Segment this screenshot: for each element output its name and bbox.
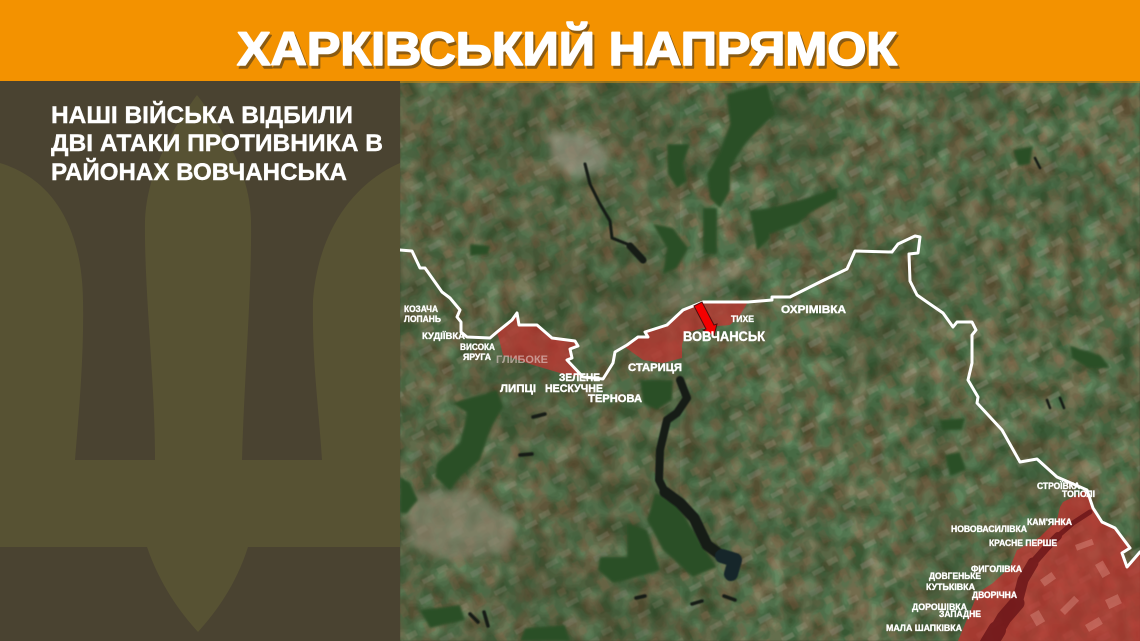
label: Kamianka: КАМ'ЯНКА bbox=[1027, 517, 1072, 527]
label: Kozacha Lopan bbox=[404, 305, 441, 322]
label: Topoli: ТОПОЛІ bbox=[1062, 489, 1095, 499]
rivers and reservoirs bbox=[470, 158, 1064, 626]
text: summary: ДВІ АТАКИ ПРОТИВНИКА В bbox=[51, 130, 383, 157]
label: Stroivka: СТРОЇВКА bbox=[1037, 481, 1080, 491]
map field texture bbox=[400, 81, 1140, 641]
label: Kozacha Lopan: ЛОПАНЬ bbox=[404, 314, 441, 324]
label: Vysoka Yaruha: ЯРУГА bbox=[463, 352, 491, 362]
header band bbox=[0, 0, 1140, 83]
label: Doroshivka: ДОРОШІВКА bbox=[912, 602, 967, 612]
label: Vysoka Yaruha bbox=[460, 343, 495, 360]
label: Zapadne: ЗАПАДНЕ bbox=[939, 609, 981, 619]
label: Krasne Pershe: КРАСНЕ ПЕРШЕ bbox=[989, 538, 1057, 548]
panel: left description bbox=[0, 81, 400, 641]
label: Kudiivka: КУДІЇВКА bbox=[422, 331, 466, 341]
text: summary: НАШІ ВІЙСЬКА ВІДБИЛИ bbox=[51, 101, 353, 129]
label: Okhrimivka: ОХРІМІВКА bbox=[781, 304, 846, 316]
urban areas bbox=[407, 132, 760, 560]
label: Zelene: ЗЕЛЕНЕ bbox=[559, 372, 600, 384]
label: Kozacha Lopan: КОЗАЧА bbox=[404, 304, 438, 314]
occupied area: Hlyboke bbox=[498, 317, 580, 376]
arrow: attack on Vovchansk bbox=[694, 302, 717, 336]
light field patches in occupied area bbox=[1030, 539, 1122, 632]
label: Vysoka Yaruha: ВИСОКА bbox=[460, 342, 495, 352]
label: Hlyboke: ГЛИБОКЕ bbox=[496, 354, 548, 366]
title: ХАРКІВСЬКИЙ НАПРЯМОК bbox=[239, 25, 899, 78]
forests bbox=[400, 84, 1110, 641]
label: Ternova: ТЕРНОВА bbox=[588, 393, 642, 405]
label: Dovhenke: ДОВГЕНЬКЕ bbox=[929, 571, 981, 581]
label: Tykhe: ТИХЕ bbox=[731, 314, 754, 324]
text: summary bbox=[51, 101, 383, 186]
label: Vovchansk: ВОВЧАНСЬК bbox=[683, 328, 765, 344]
front line border bbox=[400, 236, 1140, 567]
settlement labels bbox=[404, 304, 1095, 633]
label: Dvorichna: ДВОРІЧНА bbox=[972, 590, 1017, 600]
label: Lyptsi: ЛИПЦІ bbox=[500, 383, 536, 395]
label: Kutkivka: КУТЬКІВКА bbox=[926, 582, 975, 592]
label: Mala Shapkivka: МАЛА ШАПКІВКА bbox=[886, 623, 962, 633]
occupied area: Vovchansk bbox=[625, 302, 748, 363]
icon: trident watermark bbox=[0, 95, 400, 632]
label: Fyholivka: ФИГОЛІВКА bbox=[971, 564, 1022, 574]
title: ХАРКІВСЬКИЙ НАПРЯМОК bbox=[237, 22, 897, 75]
label: Neskuchne: НЕСКУЧНЕ bbox=[545, 383, 603, 395]
label: Starytsia: СТАРИЦЯ bbox=[628, 362, 682, 374]
panel: satellite map bbox=[400, 81, 1140, 641]
occupied area: Dvorichna sector bbox=[958, 490, 1140, 641]
text: summary: РАЙОНАХ ВОВЧАНСЬКА bbox=[51, 158, 347, 186]
label: Novovasylivka: НОВОВАСИЛІВКА bbox=[951, 524, 1027, 534]
river in occupied area bbox=[988, 512, 1090, 641]
